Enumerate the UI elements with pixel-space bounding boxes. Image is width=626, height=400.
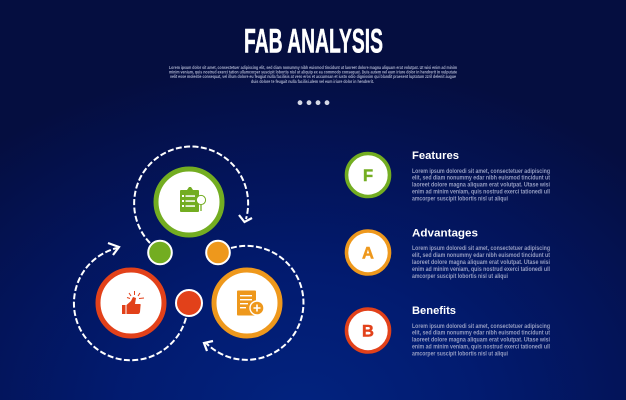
badge B: [346, 309, 390, 352]
badge A: A: [362, 244, 374, 262]
heading: advantages: Advantages: [412, 228, 478, 240]
list item: benefits: [346, 305, 550, 357]
text: benefits: amcorper suscipit lobortis nisl ut aliqui: [412, 350, 508, 357]
cycle diagram: [74, 147, 303, 360]
text: advantages: elit, sed diam nonummy edar nibh euismod tincidunt ut: [412, 252, 550, 259]
node: red circle with thumbs-up icon: [98, 270, 164, 336]
text: advantages: enim ad minim veniam, quis nostrud exerci tationedi ull: [412, 266, 550, 273]
text: benefits: laoreet dolore magna aliquam erat volutpat. Utase wisi: [412, 337, 550, 344]
text: features: laoreet dolore magna aliquam erat volutpat. Utase wisi: [412, 182, 550, 189]
dashed arrow: orange: [204, 246, 303, 360]
text: features: elit, sed diam nonummy edar nibh euismod tincidunt ut: [412, 175, 550, 182]
node: green circle with clipboard icon: [156, 169, 222, 235]
heading: features: Features: [412, 150, 459, 162]
text: benefits: elit, sed diam nonummy edar nibh euismod tincidunt ut: [412, 330, 550, 337]
badge A: [346, 231, 390, 274]
text: advantages: [412, 245, 550, 280]
connector dot: orange: [206, 241, 230, 264]
intro paragraph: minim veniam, quis nostrud exerci tation ullamcorper suscipit lobortis nisl ut aliquip ex ea commodo consequat. Duis autem vel eum iriure dolor in hendrerit in vulputate: [169, 70, 457, 75]
icon: thumbs up: [122, 291, 144, 314]
text: features: enim ad minim veniam, quis nostrud exerci tationedi ull: [412, 188, 550, 196]
intro paragraph: [169, 65, 457, 84]
connector dot: red: [176, 290, 202, 316]
intro paragraph: velit esse molestie consequat, vel illum dolore eu feugiat nulla facilisis at vero eros et accumsan et iusto odio dignissim qui blandit praesent luptatum zzril delenit augue: [170, 74, 456, 79]
icon: document with plus: [237, 290, 264, 316]
heading: benefits: Benefits: [412, 305, 456, 317]
dashed arrow: red: [74, 243, 186, 360]
icon: clipboard with magnifier: [180, 187, 206, 212]
badge F: F: [363, 167, 373, 185]
node: orange circle with document icon: [214, 270, 280, 336]
text: advantages: Lorem ipsum doloredi sit amet, consectetuer adipiscing: [412, 245, 550, 252]
dashed arrow: green: [134, 147, 252, 243]
text: features: [412, 168, 550, 202]
title: FAB ANALYSIS: [244, 22, 383, 60]
list item: advantages: [346, 228, 550, 280]
badge B: B: [362, 322, 374, 340]
badge F: [346, 154, 390, 196]
intro paragraph: duis dolore te feugait nulla facilisi.ulem vel eum iriure dolor in hendrerit.: [251, 79, 374, 84]
text: benefits: Lorem ipsum doloredi sit amet, consectetuer adipiscing: [412, 323, 550, 330]
text: benefits: [412, 323, 550, 357]
pagination dots: [298, 100, 329, 105]
text: features: amcorper suscipit lobortis nisl ut aliqui: [412, 195, 508, 202]
connector dot: green: [148, 241, 172, 264]
text: benefits: enim ad minim veniam, quis nostrud exerci tationedi ull: [412, 344, 550, 350]
intro paragraph: Lorem ipsum dolor sit amet, consectetuer adipiscing elit, sed diam nonummy nibh euismod tincidunt ut laoreet dolore magna aliquam erat volutpat. Ut wisi enim ad minim: [169, 65, 457, 70]
text: advantages: amcorper suscipit lobortis nisl ut aliqui: [412, 273, 508, 280]
text: advantages: laoreet dolore magna aliquam erat volutpat. Utase wisi: [412, 259, 550, 266]
list item: features: [346, 150, 550, 202]
text: features: Lorem ipsum doloredi sit amet, consectetuer adipiscing: [412, 168, 550, 175]
